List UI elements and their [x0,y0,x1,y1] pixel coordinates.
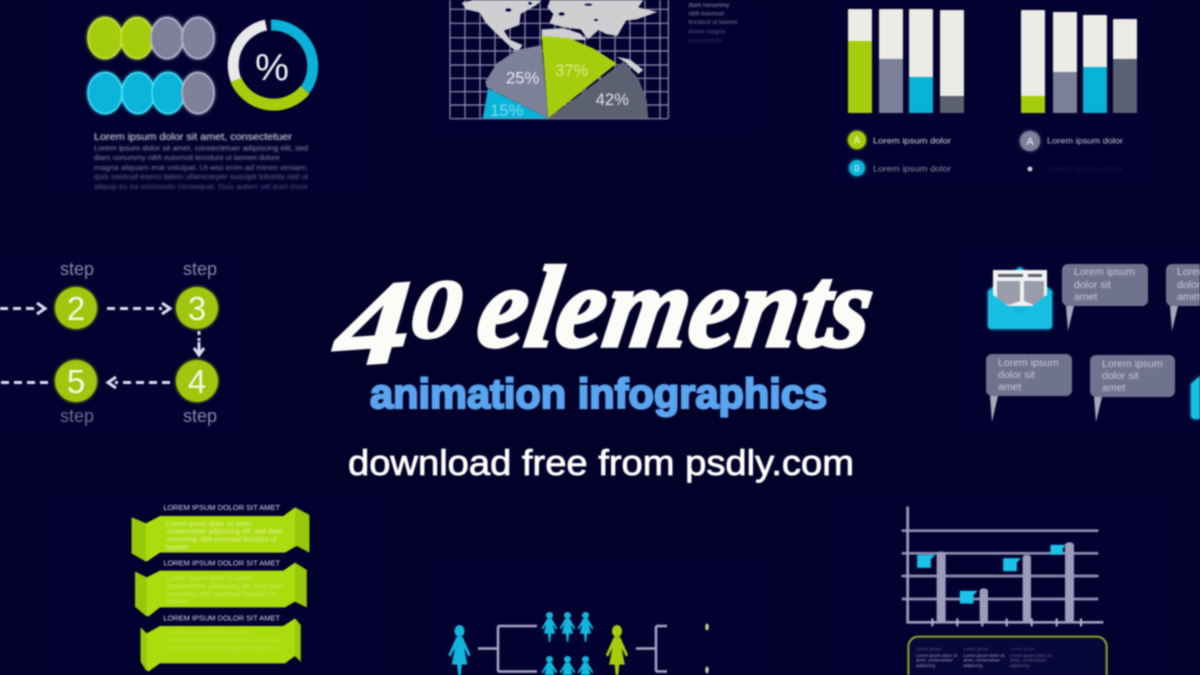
title: number: 0 [408,262,465,357]
info box: adipiscing [916,663,936,668]
step nodes [55,287,218,402]
info box: Lorem ipsum dolor sit [963,653,1006,658]
legend: Lorem ipsum dolor [873,136,951,146]
speech bubble three [986,354,1072,422]
bar chart: group two [1021,10,1137,113]
chart bars [937,542,1074,622]
pie chart: 37% [555,61,589,80]
ribbon one: Lorem ipsum dolor sit amet, [167,521,253,528]
info box: amet, consectetuer [963,658,1001,663]
ribbon one: laoreet [167,544,188,551]
ribbon three: nonummy nibh euismod tincidunt ut [167,646,277,653]
step labels: step [60,406,94,426]
panel: stacked bars [825,0,1160,185]
ribbon two: laoreet [167,599,188,606]
icon: envelope [988,267,1052,329]
step numbers: 3 [188,290,206,327]
legend: Lorem ipsum dolor [1047,136,1123,146]
speech bubble two [1166,264,1200,331]
icon: progress circles row one [88,18,214,58]
step numbers: 4 [188,363,206,400]
donut chart [233,25,313,105]
info box: adipiscing [963,663,983,668]
title: word: elements [470,244,882,372]
bracket one [478,626,537,672]
text block: lorem description: diam nonummy nibh euismod tincidunt ut laoreet dolore [94,153,280,162]
speech bubble three: dolor sit [998,369,1035,381]
legend: B [854,164,860,174]
info box: amet, consectetuer [916,658,953,663]
download line: download free from psdly.com [348,442,854,483]
speech bubble one [1062,264,1148,331]
text block: map side note: consectetuer [688,39,723,45]
map holes [505,2,629,25]
info box: Lorem ipsum [1010,647,1035,652]
step numbers: 5 [67,363,85,400]
icon: progress circles row two [88,72,214,114]
speech bubble two: dolor [1177,279,1200,291]
info box: adipiscing [1010,663,1030,668]
info box [908,637,1107,675]
ribbon three: Lorem ipsum dolor sit amet, [167,630,253,637]
ribbon three: consectetuer adipiscing elit, sed diam [167,638,283,645]
markers [705,624,709,674]
step numbers: 2 [67,290,85,327]
speech bubble four: dolor sit [1102,370,1139,382]
info box: Lorem ipsum [963,647,989,652]
text block: map side note: nibh euismod [688,11,724,17]
title: number: 4 [332,256,415,393]
ribbon one: nonummy nibh euismod tincidunt ut [167,536,277,543]
panel: circle progress and donut [38,0,368,195]
speech bubble one: Lorem ipsum [1074,266,1135,278]
pie chart: 15% [490,101,524,120]
step labels: step [183,406,217,426]
icon: cyan woman large [448,625,471,675]
speech bubble three: Lorem ipsum [998,357,1059,369]
pie chart: 25% [506,68,540,87]
ribbon two: consectetuer adipiscing elit, sed diam [167,583,283,590]
text block: lorem description: Lorem ipsum dolor sit amet, consectetuer [94,132,293,143]
legend: Lorem ipsum dolor [1047,164,1123,174]
pie chart: 42% [596,90,629,109]
panel: world map and pie [430,0,765,135]
panel: people tree [430,555,770,675]
text block: map side note [688,3,738,45]
ribbon three [141,613,301,672]
panel: step flow [0,250,245,435]
text block: map side note: diam nonummy [688,3,729,9]
ribbon two: Lorem ipsum dolor sit amet, [167,576,253,583]
text block: lorem description: aliquip ex ea commodo consequat. Duis autem vel eum iriure [94,182,308,191]
info box: amet, consectetuer [1010,658,1047,663]
icon: green woman [606,625,628,675]
legend: A [1026,136,1034,148]
ribbon two: nonummy nibh euismod tincidunt ut [167,591,277,598]
title [329,244,882,393]
text block: lorem description: Lorem ipsum dolor sit amet, consectetuer adipiscing elit, sed [94,144,308,152]
info box: Lorem ipsum dolor sit [1010,653,1052,658]
speech bubble four: amet [1102,382,1125,394]
speech bubble four: Lorem ipsum [1102,358,1163,370]
legend [848,131,1123,176]
callout markers [917,545,1065,603]
speech bubble four [1090,355,1175,422]
icon: cropped envelope [1191,376,1200,419]
legend: A [854,136,861,146]
ribbon three: LOREM IPSUM DOLOR SIT AMET [163,613,280,622]
ribbon two [135,558,307,617]
world map [462,0,657,74]
legend: Lorem ipsum dolor [873,164,951,174]
ribbon one: consectetuer adipiscing elit, sed diam [167,528,283,535]
step labels [60,259,217,426]
speech bubble two: amet [1177,291,1200,303]
panel: ribbons [50,490,390,675]
panel: bar chart with callouts [830,495,1170,675]
ribbon one [132,503,309,562]
step numbers [67,290,206,400]
text block: lorem description: quis nostrud exerci tation ullamcorper suscipit lobortis nisl ut [94,172,309,181]
icons: cyan women group [542,612,593,675]
ribbon one: LOREM IPSUM DOLOR SIT AMET [163,503,280,512]
speech bubble one: dolor sit [1074,279,1111,291]
panel: speech bubbles [952,248,1200,435]
text block: map side note: tincidunt ut laoreet [688,20,738,26]
subtitle: animation infographics [370,370,827,417]
map grid [450,0,668,119]
bracket two [636,626,667,672]
text block: lorem description: magna aliquam erat volutpat. Ut wisi enim ad minim veniam, [94,163,308,172]
donut chart: % [255,47,289,89]
text block: map side note: dolore magna [688,29,726,35]
info box: Lorem ipsum [916,647,941,652]
arrows: dashed connectors [0,303,204,388]
step labels: step [60,259,94,279]
text block: lorem description [94,132,309,191]
speech bubble three: amet [998,381,1021,393]
step labels: step [183,259,217,279]
ribbon two: LOREM IPSUM DOLOR SIT AMET [163,558,280,567]
pie chart [483,36,648,120]
info box: Lorem ipsum dolor sit [916,653,958,658]
bar chart: group one [848,9,964,113]
chart grid and axes [902,507,1103,626]
speech bubble one: amet [1074,291,1097,303]
